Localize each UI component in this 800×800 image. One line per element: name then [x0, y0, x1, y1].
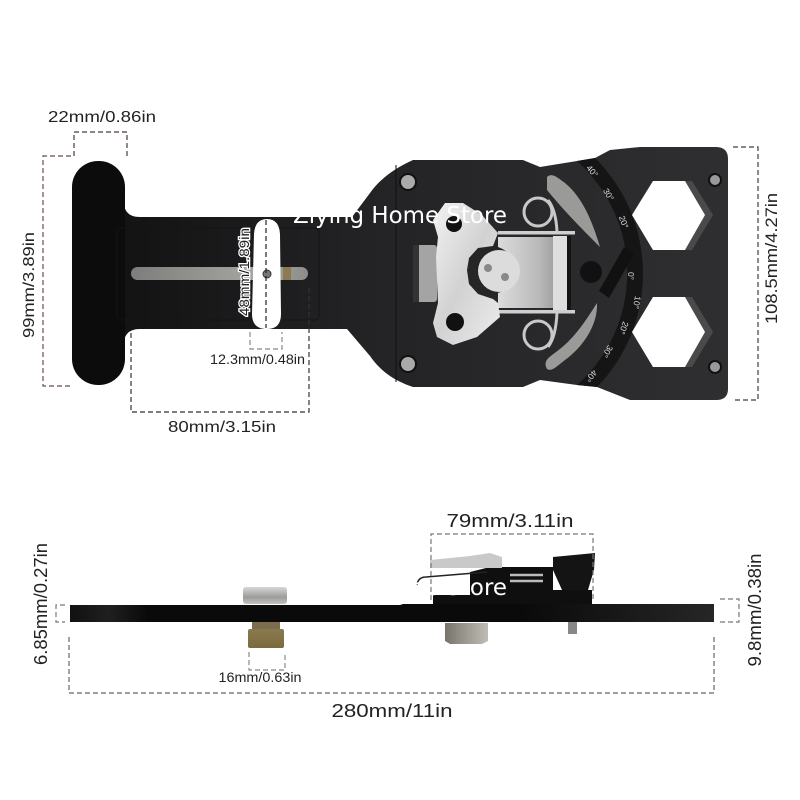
latch tab: [413, 245, 437, 302]
protractor labels: 40°: [583, 368, 599, 384]
grey arc slots: [547, 175, 600, 247]
label: 6.85mm: 6.85mm/0.27in: [31, 543, 51, 665]
body seam: [395, 165, 397, 382]
clamp block on plate: [243, 587, 287, 604]
black knob side: [553, 553, 595, 590]
label: 22mm: 22mm/0.86in: [48, 109, 156, 126]
label: 12.3mm: 12.3mm/0.48in: [210, 352, 305, 367]
label: 108.5mm: 108.5mm/4.27in: [762, 193, 781, 324]
side plate: [70, 604, 714, 622]
hexagon cut-outs: [632, 181, 713, 367]
brass screw in slot: [283, 267, 291, 280]
latch chrome plate: [433, 203, 500, 345]
label: 80mm: 80mm/3.15in: [168, 419, 276, 436]
protractor labels: 10°: [631, 295, 643, 310]
hex nut: [445, 623, 488, 644]
latch central rivet: [478, 250, 520, 292]
protractor labels: 30°: [600, 343, 615, 360]
protractor labels: [583, 163, 643, 384]
top view: tool from above: [72, 147, 728, 400]
dashed dimension lines: [43, 132, 758, 693]
watermark top: Ziying Home Store: [293, 203, 507, 229]
label: 280mm: 280mm/11in: [332, 701, 452, 721]
label: 99mm: 99mm/3.89in: [21, 232, 38, 338]
latch central rivet shadow: [467, 246, 515, 294]
label: 79mm: 79mm/3.11in: [446, 511, 574, 531]
watermark bottom: Ziying Home Store: [293, 575, 507, 601]
latch block side: [433, 567, 592, 604]
protractor labels: 20°: [617, 214, 631, 230]
chrome latch side: [430, 553, 502, 568]
knurled brass knob: [252, 622, 280, 630]
plate pins: [709, 174, 721, 186]
side view: tool profile: [70, 553, 714, 648]
label: 48mm: 48mm/1.89in: [236, 228, 252, 316]
screw tip: [568, 622, 577, 634]
latch keeper: [560, 236, 571, 311]
protractor scale band: [577, 158, 643, 387]
T-handle end bar: [72, 161, 125, 385]
label: 16mm: 16mm/0.63in: [218, 670, 302, 685]
latch springs: [524, 198, 557, 349]
protractor labels: 0°: [626, 272, 636, 280]
slider screw: [263, 270, 271, 278]
locking knob: [580, 261, 602, 283]
label: 9.8mm: 9.8mm/0.38in: [745, 554, 765, 666]
white slider cut-out: [252, 219, 281, 329]
body screw holes: [400, 174, 416, 372]
protractor labels: 20°: [617, 320, 631, 336]
arm slot: [131, 267, 308, 280]
sliding arm and body: [124, 147, 728, 400]
protractor labels: 40°: [584, 163, 600, 179]
arm recessed panel: [117, 228, 319, 320]
protractor labels: 30°: [601, 186, 616, 203]
